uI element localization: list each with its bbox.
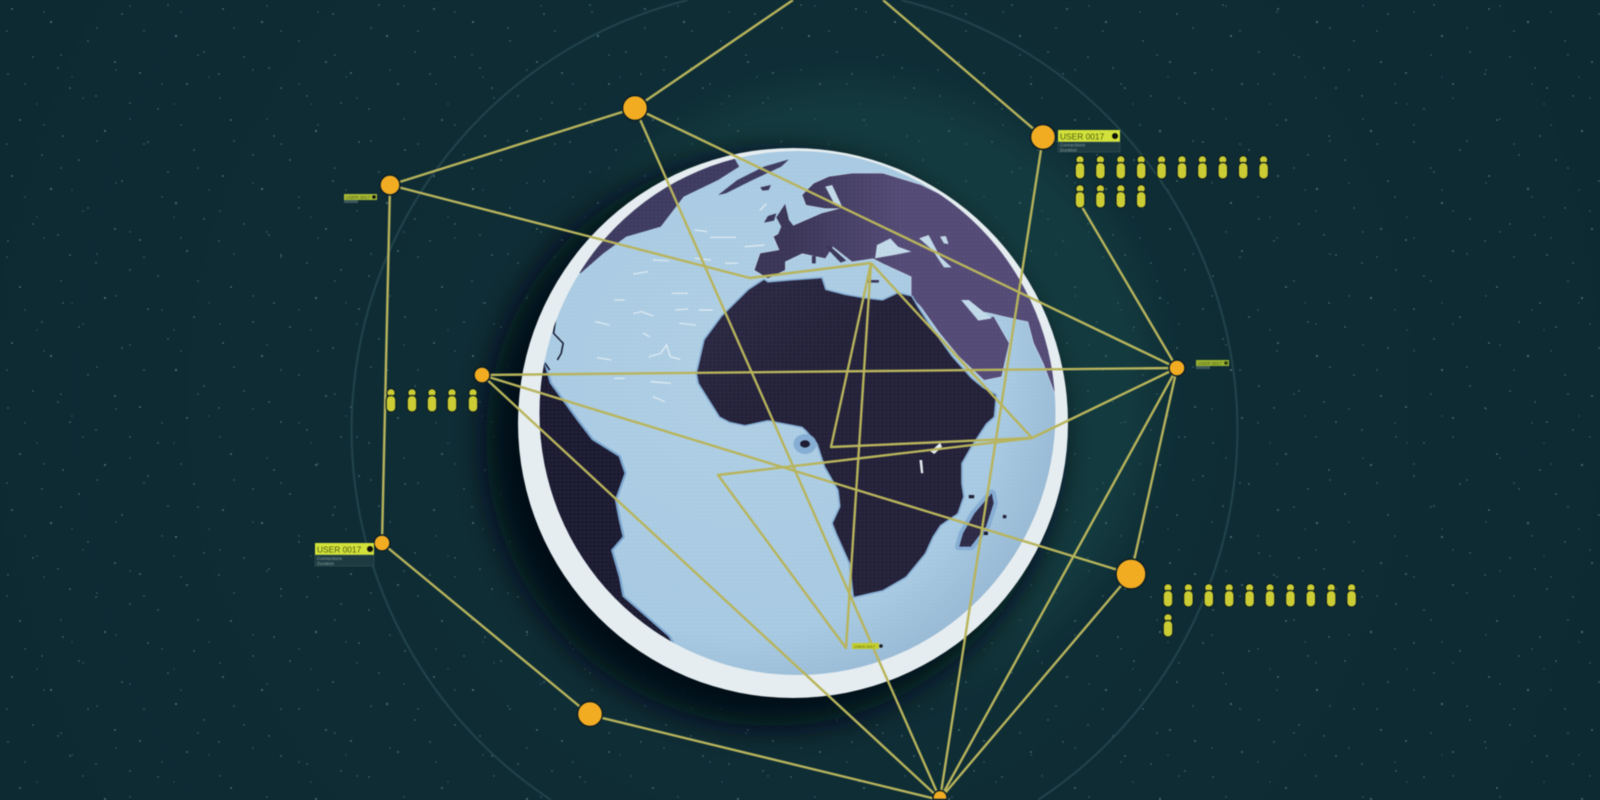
network nodes (374, 96, 1185, 800)
user label: right small (1196, 360, 1229, 369)
North American coastline (545, 320, 563, 370)
user label: right small: USER 0017 (1198, 361, 1222, 366)
Africa (697, 278, 996, 597)
user label: lower left: Connections (317, 556, 343, 561)
Iceland (760, 185, 771, 191)
user label: top right: USER 0017 (1060, 132, 1105, 142)
node: large right (1116, 559, 1146, 589)
Madagascar (959, 493, 994, 547)
user label: upper left small: USER 0017 (346, 195, 370, 200)
east African lakes and islands (919, 443, 942, 473)
node: right (1169, 360, 1185, 376)
Gulf of Guinea shelf (794, 434, 816, 454)
Italy and Mediterranean islands (812, 246, 879, 283)
Britain and Ireland (764, 204, 795, 236)
user label: lower left: Duration (317, 561, 335, 566)
Black Sea and inland waters (825, 185, 992, 321)
user icons: top right group (1075, 156, 1268, 208)
user label: lower left: USER 0017 (317, 544, 362, 554)
globe white rim (518, 148, 1068, 698)
user label: top right: Connections (1060, 142, 1086, 148)
user label: upper left small (344, 194, 377, 203)
user icons: left group (386, 389, 478, 412)
network connection lines (382, 0, 1177, 799)
ocean mesh texture (540, 151, 1056, 675)
orbit ring (352, 0, 1237, 800)
Arctic Canada (579, 158, 740, 274)
continents (500, 150, 1055, 643)
small dark islands (969, 495, 1006, 535)
node: top right (1030, 124, 1056, 150)
globe drop shadow (486, 154, 1058, 726)
user label: on globe small: USER 0017 (854, 644, 876, 649)
Greenland (718, 159, 789, 195)
Atlantic cloud streaks (596, 204, 766, 402)
node: top left (622, 96, 648, 120)
node: mid left (474, 367, 490, 383)
lake dot (800, 440, 810, 448)
South America (538, 361, 675, 644)
user label: top right (1058, 130, 1120, 152)
globe glow halo (520, 60, 1180, 720)
globe ocean (540, 151, 1056, 675)
globe (500, 148, 1068, 698)
user label: top right: Duration (1060, 148, 1078, 152)
node: bottom hub (933, 790, 947, 800)
node: lower left (374, 535, 390, 551)
Eurasia (754, 173, 1055, 393)
user icons: lower right group (1163, 584, 1356, 637)
user label: lower left (315, 543, 374, 566)
user label: on globe small (852, 643, 883, 649)
node: bottom left (578, 702, 602, 726)
node: upper left (380, 175, 400, 195)
